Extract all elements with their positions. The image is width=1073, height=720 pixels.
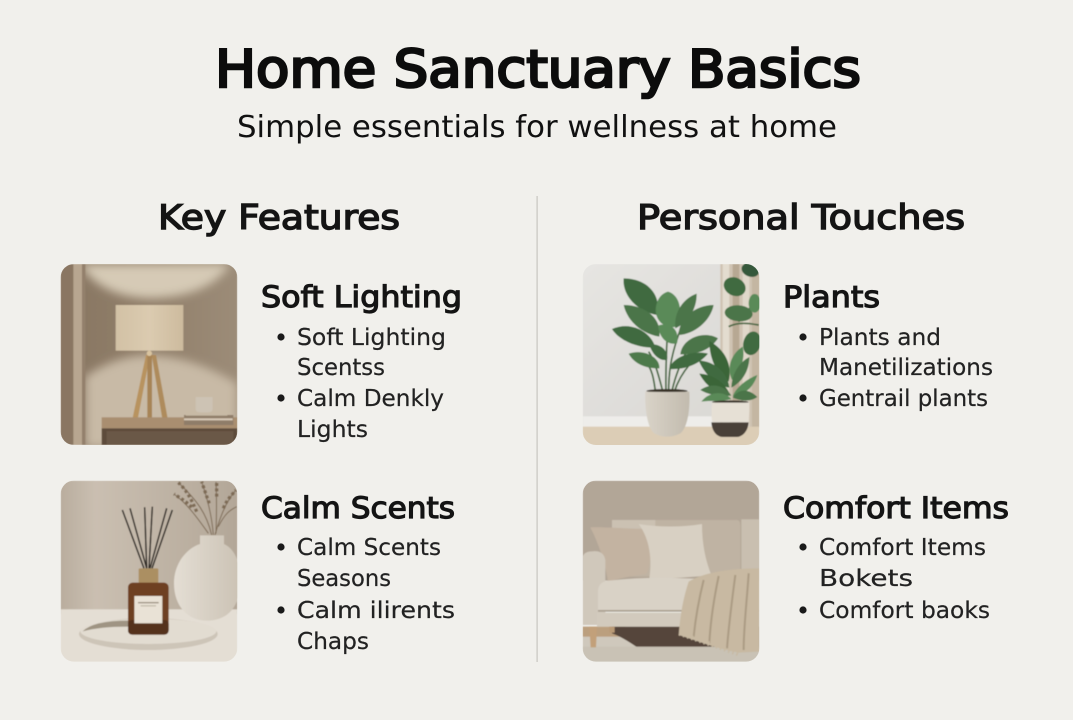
item: soft lighting: Calm Denkly <box>297 386 444 412</box>
title: Home Sanctuary Basics <box>215 40 861 100</box>
item title: soft lighting: Soft Lighting <box>261 280 462 314</box>
image: reed diffuser <box>61 481 240 663</box>
item: calm scents: Calm Scents <box>297 535 441 561</box>
item: calm scents <box>261 491 455 655</box>
item: plants: Manetilizations <box>819 355 993 381</box>
item: plants: Gentrail plants <box>819 386 988 412</box>
item: comfort items <box>783 491 1009 624</box>
item: plants <box>783 280 993 412</box>
item: calm scents: Seasons <box>297 566 391 592</box>
image: sofa with throw <box>583 481 759 663</box>
item: calm scents: Chaps <box>297 629 369 655</box>
item title: comfort items: Comfort Items <box>783 491 1009 525</box>
item: soft lighting <box>261 280 462 443</box>
subtitle: Simple essentials for wellness at home <box>237 110 837 145</box>
heading: personal touches: Personal Touches <box>637 198 965 238</box>
item: calm scents: Calm ilirents <box>297 598 455 624</box>
panel: personal touches <box>583 198 1009 663</box>
item: soft lighting: Soft Lighting <box>297 325 446 351</box>
item: comfort items: Comfort Items <box>819 535 986 561</box>
item title: plants: Plants <box>783 280 880 314</box>
item: soft lighting: Lights <box>297 417 368 443</box>
item: soft lighting: Scentss <box>297 355 385 381</box>
image: potted plants <box>583 261 763 447</box>
image: table lamp <box>61 264 237 448</box>
heading: key features: Key Features <box>158 198 400 238</box>
item: comfort items: Bokets <box>819 566 913 592</box>
item title: calm scents: Calm Scents <box>261 491 455 525</box>
item: comfort items: Comfort baoks <box>819 598 990 624</box>
panel: key features <box>61 198 462 663</box>
item: plants: Plants and <box>819 325 941 351</box>
